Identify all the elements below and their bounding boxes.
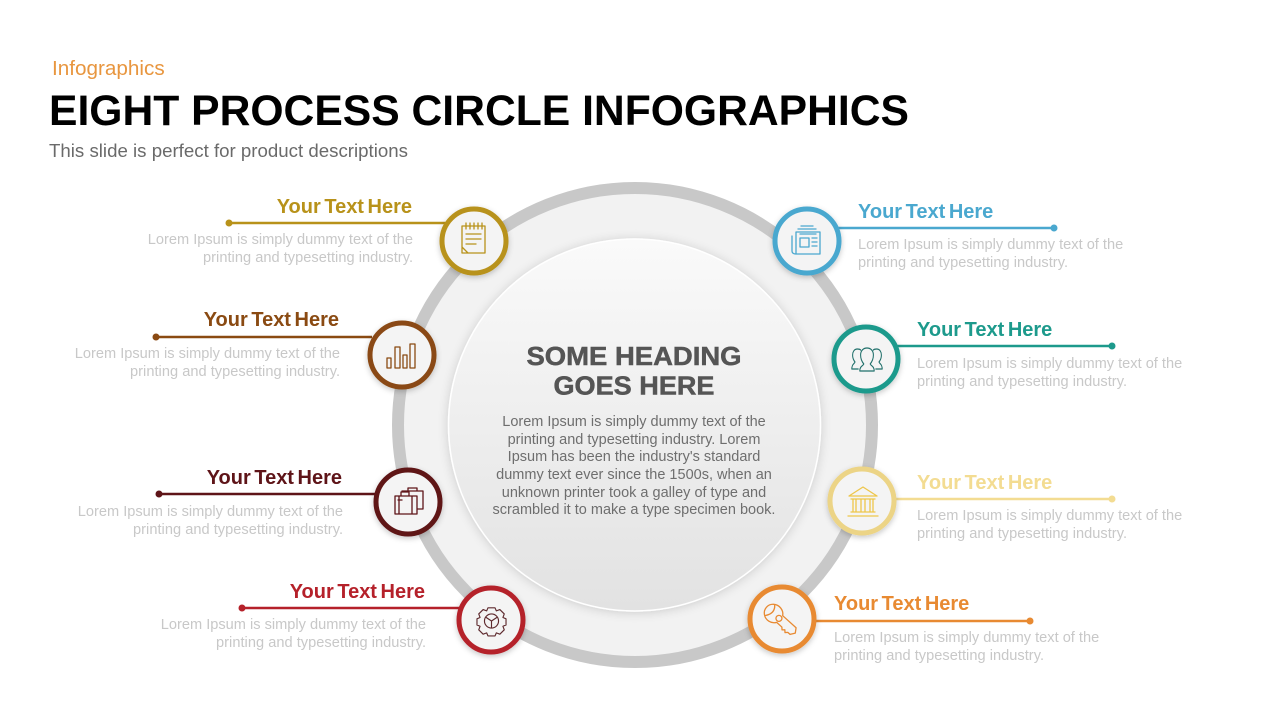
description: Lorem Ipsum is simply dummy text of the	[858, 237, 1123, 253]
heading: Your Text Here	[917, 472, 1052, 494]
item 7: pale yellow	[830, 469, 1182, 542]
icon: people	[852, 348, 882, 371]
description: printing and typesetting industry.	[917, 374, 1127, 390]
icon: bar chart	[387, 344, 415, 368]
icon: newspaper	[792, 226, 820, 254]
title: EIGHT PROCESS CIRCLE INFOGRAPHICS	[49, 87, 909, 135]
description: Lorem Ipsum is simply dummy text of the	[148, 232, 413, 248]
item 5: blue	[775, 201, 1123, 273]
leader line	[226, 220, 445, 226]
icon: notepad	[462, 223, 485, 253]
heading: Your Text Here	[917, 319, 1052, 341]
leader line	[238, 604, 460, 612]
item 8: orange	[750, 587, 1099, 664]
center heading: GOES HERE	[554, 370, 714, 400]
item 1: gold	[148, 196, 506, 273]
center body text: Ipsum has been the industry's standard	[508, 449, 760, 465]
heading: Your Text Here	[834, 593, 969, 615]
central circle graphic	[398, 188, 872, 662]
heading: Your Text Here	[277, 196, 412, 218]
node circle	[376, 470, 440, 534]
item 2: brown	[75, 309, 434, 387]
description: printing and typesetting industry.	[917, 526, 1127, 542]
node circle	[459, 588, 523, 652]
leader line	[812, 618, 1034, 624]
node circle	[830, 469, 894, 533]
node circle	[834, 327, 898, 391]
description: Lorem Ipsum is simply dummy text of the	[917, 356, 1182, 372]
subtitle: This slide is perfect for product descriptions	[49, 140, 408, 161]
description: Lorem Ipsum is simply dummy text of the	[834, 630, 1099, 646]
leader line	[895, 342, 1116, 350]
icon: key	[760, 600, 801, 640]
description: printing and typesetting industry.	[130, 364, 340, 380]
heading: Your Text Here	[207, 467, 342, 489]
icon: bank	[848, 487, 878, 516]
description: Lorem Ipsum is simply dummy text of the	[161, 617, 426, 633]
center body text: unknown printer took a galley of type and	[502, 485, 766, 501]
leader line	[152, 334, 372, 340]
description: printing and typesetting industry.	[216, 635, 426, 651]
description: printing and typesetting industry.	[858, 255, 1068, 271]
node circle	[775, 209, 839, 273]
heading: Your Text Here	[290, 581, 425, 603]
item 4: red	[161, 581, 523, 652]
description: Lorem Ipsum is simply dummy text of the	[78, 504, 343, 520]
center body text: dummy text ever since the 1500s, when an	[496, 467, 772, 483]
node circle	[370, 323, 434, 387]
node circle	[750, 587, 814, 651]
center body text: Lorem Ipsum is simply dummy text of the	[502, 414, 766, 430]
center body text: scrambled it to make a type specimen book.	[493, 502, 775, 518]
description: Lorem Ipsum is simply dummy text of the	[917, 508, 1182, 524]
center body text: printing and typesetting industry. Lorem	[508, 432, 760, 448]
item 6: teal	[834, 319, 1182, 391]
description: printing and typesetting industry.	[133, 522, 343, 538]
node circle	[442, 209, 506, 273]
description: Lorem Ipsum is simply dummy text of the	[75, 346, 340, 362]
center heading: SOME HEADING	[526, 341, 742, 371]
heading: Your Text Here	[858, 201, 993, 223]
heading: Your Text Here	[204, 309, 339, 331]
description: printing and typesetting industry.	[203, 250, 413, 266]
item 3: maroon	[78, 467, 440, 538]
icon: gear	[477, 608, 506, 636]
leader line	[156, 490, 376, 498]
label: Infographics: Infographics	[52, 57, 165, 80]
leader line	[836, 224, 1058, 232]
leader line	[892, 496, 1116, 502]
inner disc	[448, 239, 820, 611]
icon: luggage	[395, 488, 423, 514]
outer grey ring	[398, 188, 872, 662]
description: printing and typesetting industry.	[834, 648, 1044, 664]
